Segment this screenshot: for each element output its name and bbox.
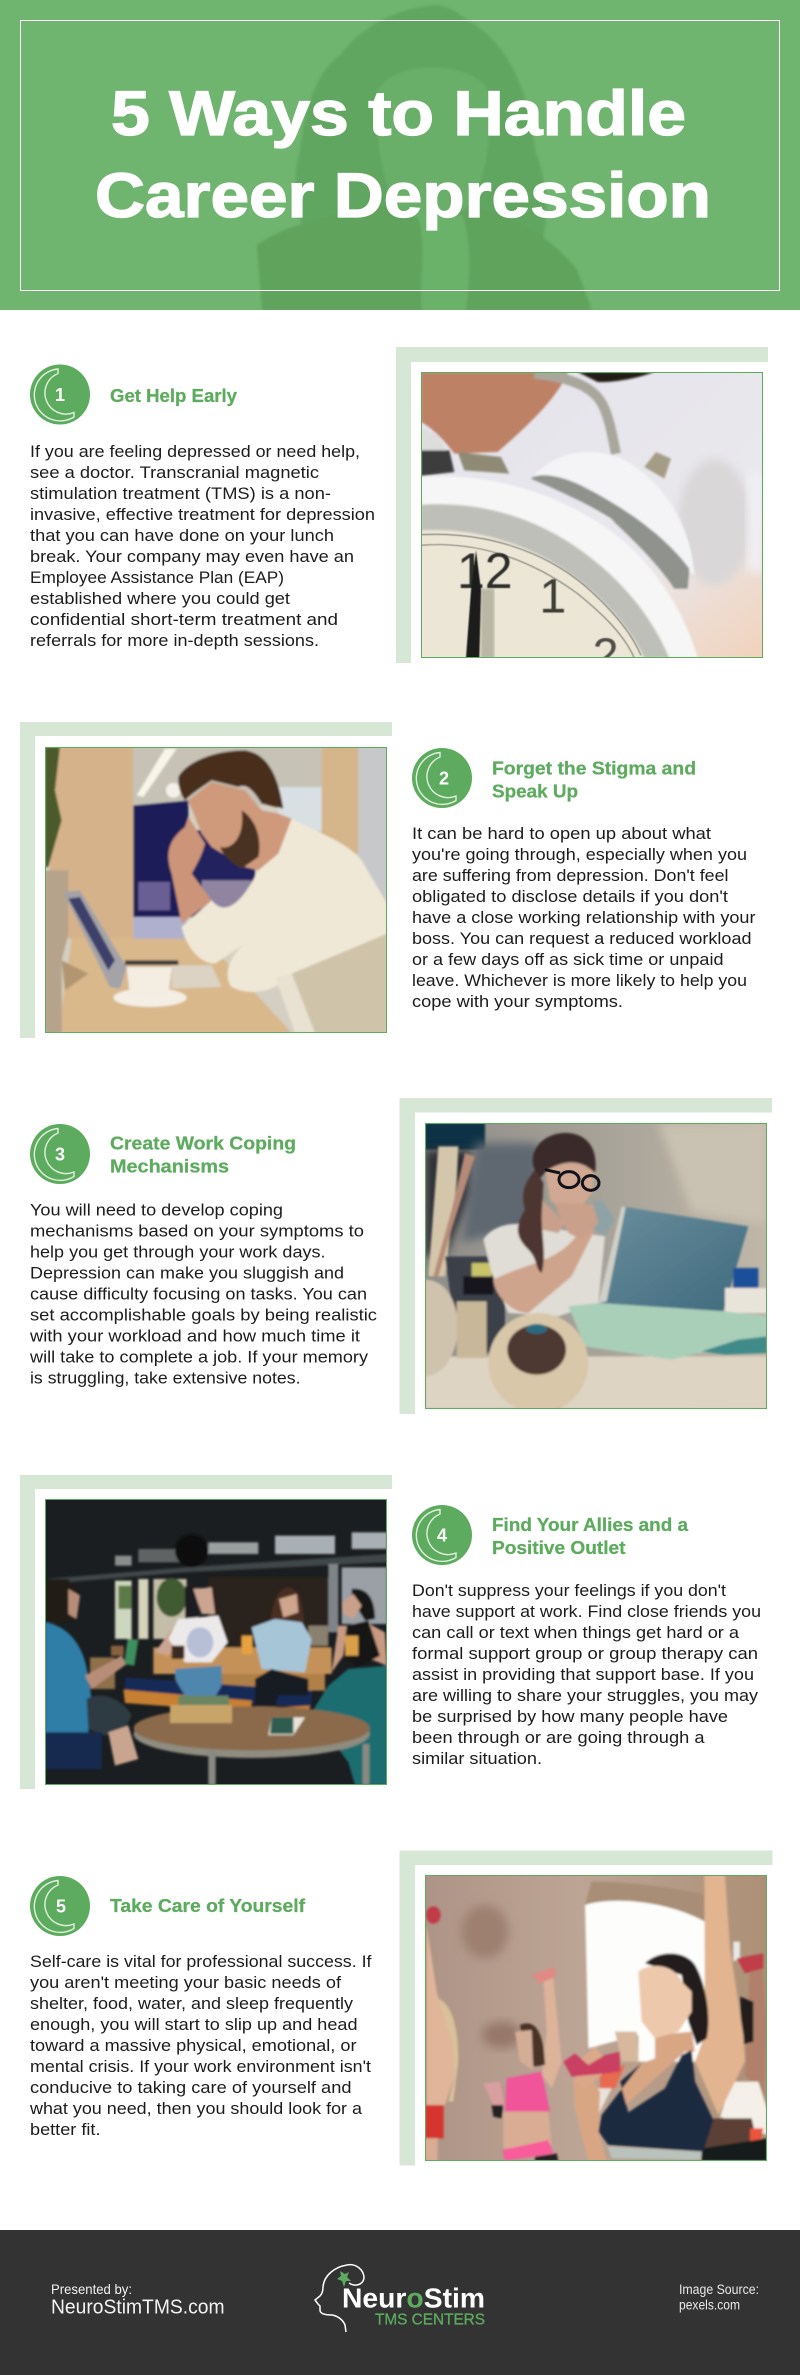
- icon: number 4 badge: 4: [437, 1526, 447, 1546]
- icon: number 4 badge: [412, 1505, 472, 1565]
- header frame: [20, 20, 780, 290]
- text block: section 1 body: referrals for more in-depth sessions.: [30, 632, 319, 650]
- text block: section 2 body: [412, 825, 756, 1011]
- text block: section 3 body: mechanisms based on your symptoms to: [30, 1222, 364, 1240]
- text block: section 2 body: leave. Whichever is more likely to help you: [412, 972, 747, 990]
- heading: Create Work Coping Mechanisms: [110, 1134, 296, 1176]
- text block: section 4 body: have support at work. Find close friends you: [412, 1603, 761, 1621]
- header banner: [0, 0, 800, 310]
- text block: section 1 body: see a doctor. Transcranial magnetic: [30, 464, 319, 482]
- heading: Forget the Stigma and Speak Up: Speak Up: [492, 782, 578, 802]
- photo frame: woman lifting dumbbells: [400, 1850, 772, 2166]
- heading: Forget the Stigma and Speak Up: [492, 758, 696, 802]
- photo frame: friends laughing at cafe: [20, 1475, 392, 1789]
- footer: image source: pexels.com: [679, 2298, 740, 2312]
- text block: section 5 body: what you need, then you should look for a: [29, 2100, 363, 2118]
- section 2: Forget the Stigma and Speak Up: [20, 722, 756, 1038]
- text block: section 5 body: toward a massive physical, emotional, or: [30, 2037, 357, 2055]
- heading: Find Your Allies and a Positive Outlet: Find Your Allies and a: [492, 1515, 689, 1535]
- text block: section 1 body: invasive, effective treatment for depression: [30, 506, 375, 524]
- footer bar: [0, 2230, 800, 2375]
- title: Career Depression: [95, 161, 711, 231]
- footer: presented by: Presented by:: [51, 2281, 132, 2297]
- text block: section 1 body: that you can have done on your lunch: [30, 527, 334, 545]
- text block: section 5 body: [29, 1953, 372, 2139]
- section 3: Create Work Coping Mechanisms: [29, 1098, 772, 1414]
- text block: section 3 body: [29, 1202, 377, 1388]
- icon: number 5 badge: [30, 1876, 90, 1936]
- text block: section 2 body: have a close working relationship with your: [412, 909, 756, 927]
- text block: section 3 body: will take to complete a job. If your memory: [29, 1348, 369, 1366]
- photo frame: alarm clock: 12: [457, 543, 513, 599]
- footer: image source: Image Source:: [679, 2282, 759, 2297]
- text block: section 1 body: break. Your company may even have an: [30, 548, 354, 566]
- logo: NeuroStim TMS Centers: NeuroStim: [342, 2282, 485, 2314]
- photo frame: woman frowning at laptop: [400, 1098, 772, 1414]
- icon: number 2 badge: 2: [439, 768, 449, 788]
- heading: Find Your Allies and a Positive Outlet: Positive Outlet: [492, 1538, 626, 1558]
- text block: section 3 body: cause difficulty focusing on tasks. You can: [30, 1286, 367, 1304]
- text block: section 4 body: similar situation.: [412, 1750, 542, 1768]
- text block: section 3 body: help you get through your work days.: [30, 1244, 326, 1262]
- text block: section 3 body: You will need to develop coping: [30, 1202, 283, 1220]
- text block: section 2 body: cope with your symptoms.: [412, 993, 623, 1011]
- text block: section 3 body: set accomplishable goals by being realistic: [30, 1306, 377, 1324]
- text block: section 1 body: Employee Assistance Plan (EAP): [30, 569, 284, 587]
- text block: section 1 body: established where you could get: [30, 590, 290, 608]
- text block: section 2 body: boss. You can request a reduced workload: [412, 930, 752, 948]
- heading: Find Your Allies and a Positive Outlet: [492, 1515, 689, 1558]
- icon: number 1 badge: [30, 364, 90, 424]
- header background portrait: [257, 6, 591, 310]
- text block: section 5 body: mental crisis. If your work environment isn't: [30, 2058, 371, 2076]
- icon: number 5 badge: 5: [56, 1896, 66, 1916]
- text block: section 1 body: If you are feeling depressed or need help,: [30, 443, 360, 461]
- heading: Forget the Stigma and Speak Up: Forget the Stigma and: [492, 758, 696, 778]
- footer: image source: [679, 2282, 759, 2312]
- text block: section 2 body: you're going through, especially when you: [412, 846, 747, 864]
- heading: Create Work Coping Mechanisms: Create Work Coping: [110, 1134, 296, 1154]
- photo frame: stressed man at laptop: [20, 722, 392, 1038]
- icon: number 3 badge: 3: [55, 1144, 65, 1164]
- title: [95, 79, 711, 231]
- text block: section 3 body: Depression can make you sluggish and: [30, 1264, 344, 1282]
- text block: section 3 body: with your workload and how much time it: [29, 1328, 360, 1346]
- text block: section 3 body: is struggling, take extensive notes.: [30, 1370, 300, 1388]
- text block: section 5 body: enough, you will start to slip up and head: [30, 2016, 358, 2034]
- text block: section 5 body: Self-care is vital for professional success. If: [30, 1953, 372, 1971]
- logo: NeuroStim TMS Centers: [315, 2265, 485, 2332]
- text block: section 5 body: shelter, food, water, and sleep frequently: [30, 1995, 354, 2013]
- text block: section 4 body: Don't suppress your feelings if you don't: [412, 1582, 726, 1600]
- text block: section 4 body: be surprised by how many people have: [412, 1708, 728, 1726]
- text block: section 1 body: confidential short-term treatment and: [30, 611, 338, 629]
- heading: Get Help Early: Get Help Early: [110, 386, 237, 406]
- icon: number 2 badge: [412, 748, 472, 808]
- text block: section 1 body: [30, 443, 375, 650]
- photo frame: alarm clock: [396, 347, 768, 680]
- text block: section 4 body: been through or are going through a: [412, 1729, 705, 1747]
- text block: section 5 body: you aren't meeting your basic needs of: [30, 1974, 341, 1992]
- footer: presented by: NeuroStimTMS.com: [51, 2296, 224, 2318]
- text block: section 2 body: or a few days off as sick time or unpaid: [412, 951, 724, 969]
- icon: head outline with neuron: [315, 2265, 364, 2332]
- photo frame: alarm clock: 1: [539, 570, 566, 624]
- logo: NeuroStim TMS Centers: TMS CENTERS: [375, 2312, 485, 2328]
- text block: section 5 body: conducive to taking care of yourself and: [30, 2079, 352, 2097]
- text block: section 2 body: are suffering from depression. Don't feel: [412, 867, 728, 885]
- text block: section 5 body: better fit.: [30, 2121, 100, 2139]
- text block: section 2 body: It can be hard to open up about what: [412, 825, 711, 843]
- section 5: Take Care of Yourself: [29, 1850, 772, 2166]
- text block: section 2 body: obligated to disclose details if you don't: [412, 888, 728, 906]
- icon: number 1 badge: 1: [55, 385, 65, 405]
- photo frame: alarm clock: 2: [593, 628, 619, 680]
- text block: section 1 body: stimulation treatment (TMS) is a non-: [30, 485, 331, 503]
- text block: section 4 body: formal support group or group therapy can: [412, 1645, 758, 1663]
- heading: Take Care of Yourself: Take Care of Yourself: [110, 1896, 306, 1916]
- footer: presented by: [51, 2281, 224, 2318]
- heading: Create Work Coping Mechanisms: Mechanisms: [110, 1156, 229, 1176]
- section 1: Get Help Early: [30, 347, 768, 680]
- text block: section 4 body: can call or text when things get hard or a: [412, 1624, 740, 1642]
- text block: section 4 body: [412, 1582, 761, 1768]
- text block: section 4 body: are willing to share your struggles, you may: [412, 1687, 759, 1705]
- section 4: Find Your Allies and a Positive Outlet: [20, 1475, 761, 1789]
- icon: number 3 badge: [30, 1124, 90, 1184]
- text block: section 4 body: assist in providing that support base. If you: [412, 1666, 754, 1684]
- title: 5 Ways to Handle: [111, 79, 686, 149]
